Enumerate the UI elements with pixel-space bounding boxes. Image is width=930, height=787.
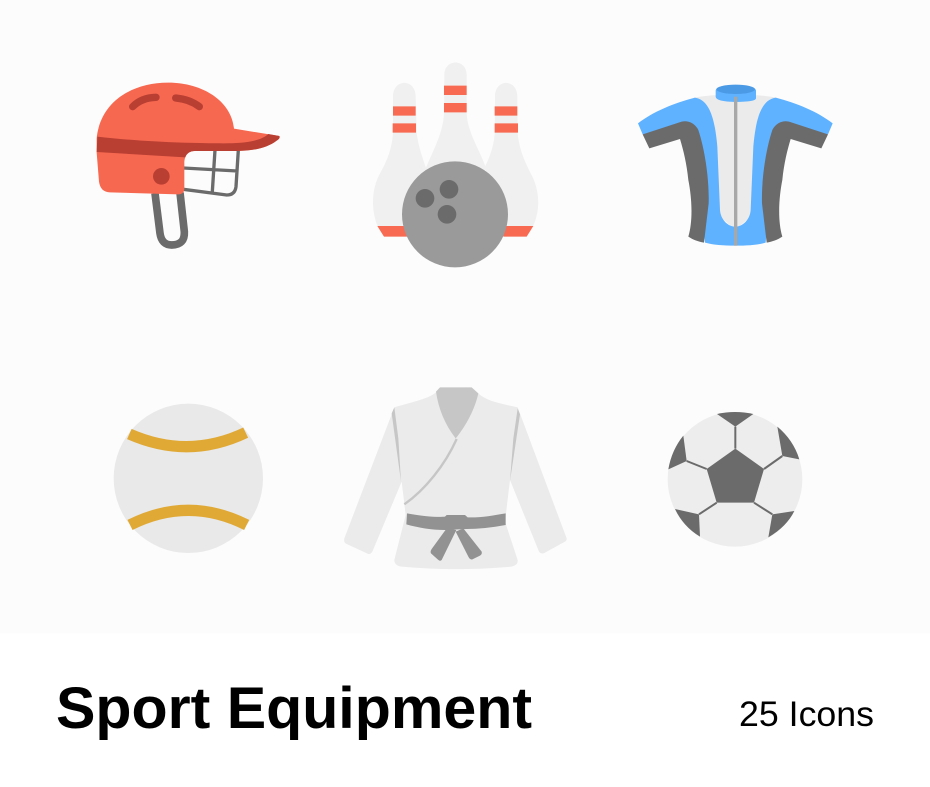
helmet band and brim shadow bbox=[97, 134, 280, 157]
gi lapel bbox=[404, 439, 457, 504]
helmet strap bbox=[155, 193, 184, 245]
gi body bbox=[344, 392, 567, 569]
ball body bbox=[668, 412, 802, 547]
jersey white center panel bbox=[693, 94, 777, 230]
bowling ball bbox=[402, 161, 508, 267]
icon count: 25 Icons bbox=[739, 695, 874, 734]
helmet vents bbox=[133, 97, 199, 107]
title: Sport Equipment bbox=[56, 676, 532, 741]
gi neck bbox=[436, 387, 478, 438]
helmet screw bbox=[153, 168, 170, 185]
jersey right panels bbox=[735, 98, 833, 246]
icon: cycling jersey bbox=[638, 85, 833, 246]
icon: bowling pins and ball bbox=[373, 62, 538, 267]
ball body bbox=[114, 404, 263, 553]
icon: batting helmet bbox=[97, 83, 280, 245]
helmet face cage bbox=[183, 150, 238, 195]
jersey collar bbox=[716, 85, 756, 102]
pin stripes bbox=[377, 86, 533, 237]
center pin bbox=[425, 62, 487, 170]
jersey zipper bbox=[734, 97, 737, 246]
ball patches bbox=[668, 412, 799, 537]
gi sleeve seams bbox=[392, 407, 520, 482]
icon: baseball bbox=[114, 404, 263, 553]
finger holes bbox=[416, 180, 458, 224]
left pin bbox=[373, 83, 427, 237]
jersey left panels bbox=[638, 98, 735, 246]
gi belt bbox=[406, 513, 506, 561]
right pin bbox=[485, 83, 538, 237]
ball seams bbox=[687, 427, 782, 514]
helmet shell bbox=[97, 83, 280, 194]
ball seams bbox=[129, 433, 247, 525]
icon: soccer ball bbox=[668, 412, 802, 547]
jersey collar inner bbox=[716, 85, 755, 94]
icon: karate gi bbox=[344, 387, 567, 569]
